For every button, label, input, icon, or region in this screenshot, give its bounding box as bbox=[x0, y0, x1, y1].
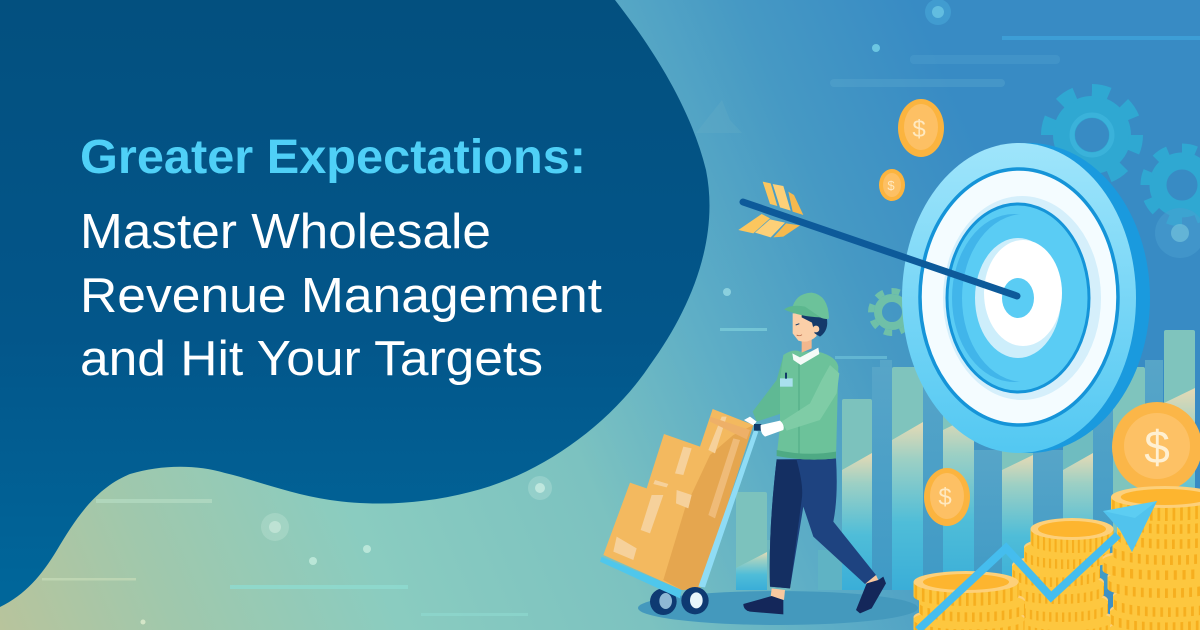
jacket details bbox=[777, 360, 836, 460]
coin: middle: $ bbox=[938, 484, 952, 511]
background bar chart bbox=[736, 330, 1195, 590]
target bbox=[902, 143, 1150, 453]
glow behind right gear bbox=[1155, 208, 1200, 258]
trolley frame bbox=[600, 430, 758, 598]
title line 2: Revenue Management bbox=[80, 269, 602, 323]
arrow in target bbox=[738, 182, 1017, 296]
front arm bbox=[782, 365, 839, 431]
growth arrow bbox=[918, 501, 1157, 630]
coin: small: $ bbox=[887, 178, 895, 193]
back arm bbox=[753, 356, 783, 422]
coin: small bbox=[879, 169, 905, 201]
icon: right gear bbox=[1146, 149, 1200, 221]
icon: small green gear bbox=[871, 291, 913, 333]
coin stack: right bbox=[1102, 486, 1200, 630]
icon: large gear bbox=[1048, 91, 1136, 179]
worker upper body bbox=[744, 293, 839, 460]
hand truck with boxes bbox=[600, 409, 758, 615]
worker legs bbox=[743, 458, 886, 614]
coin stack: middle bbox=[1012, 518, 1114, 630]
neck and face bbox=[793, 313, 827, 353]
heading: greater expectations: Greater Expectations: bbox=[80, 131, 586, 184]
collar bbox=[792, 348, 819, 365]
title bbox=[80, 131, 602, 386]
coin stack: left bbox=[914, 571, 1025, 630]
coin: middle bbox=[924, 468, 970, 526]
wheels bbox=[650, 587, 709, 615]
boxes bbox=[603, 409, 753, 590]
title line 1: Master Wholesale bbox=[80, 205, 491, 259]
title line 3: and Hit Your Targets bbox=[80, 332, 543, 386]
large coin on stack: $ bbox=[1144, 421, 1170, 473]
jacket bbox=[777, 351, 838, 460]
navy title blob bbox=[0, 0, 709, 607]
gloves and handle bbox=[744, 417, 784, 437]
cap bbox=[784, 293, 829, 319]
large coin on stack bbox=[1112, 402, 1200, 492]
coin: top: $ bbox=[912, 116, 926, 143]
coin: top bbox=[898, 99, 944, 157]
ground shadow bbox=[638, 591, 918, 625]
